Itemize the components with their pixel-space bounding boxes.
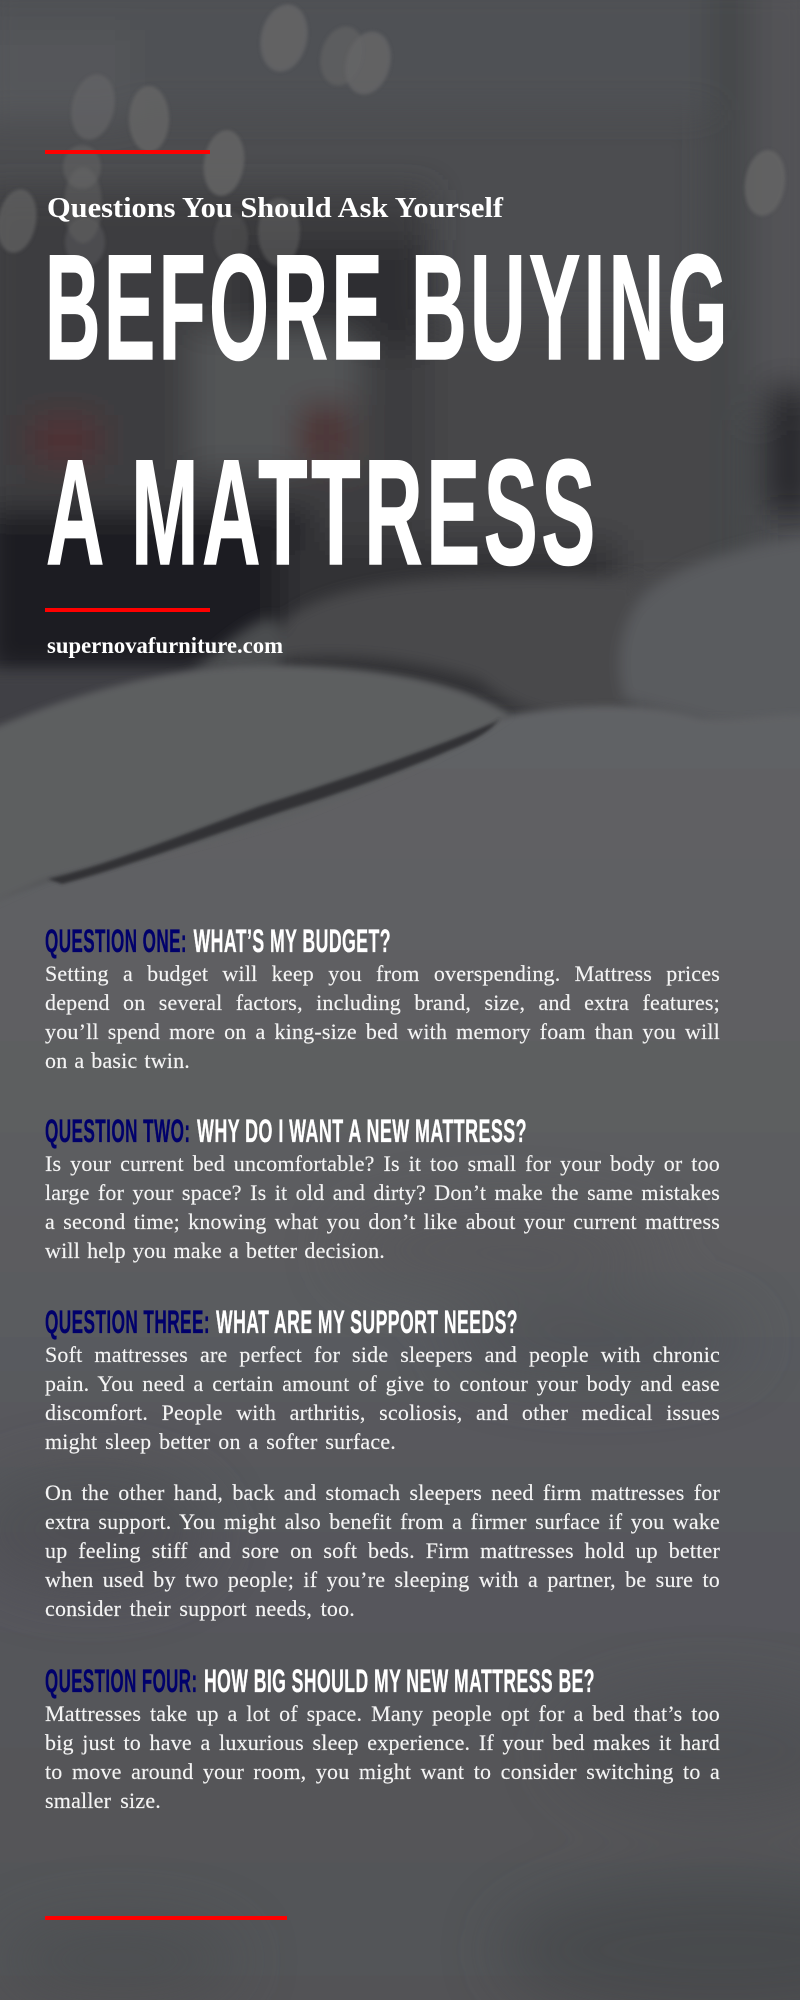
mattress surface — [0, 706, 800, 2000]
bottom red rule — [45, 1916, 287, 1920]
crease between pillow and mattress — [48, 718, 500, 884]
heading: question four — [45, 1663, 595, 1699]
heading: question two: QUESTION TWO: — [45, 1113, 190, 1149]
body text: question three: might sleep better on a softer surface. — [45, 1429, 396, 1454]
body text: question four: Mattresses take up a lot of space. Many people opt for a bed that’s too — [45, 1701, 720, 1726]
body text: question one: you’ll spend more on a king-size bed with memory foam than you will — [45, 1019, 720, 1044]
body text: question four — [44, 1701, 720, 1813]
heading: question three: WHAT ARE MY SUPPORT NEEDS? — [216, 1304, 518, 1340]
body text: question three: discomfort. People with arthritis, scoliosis, and other medical issues — [45, 1400, 720, 1425]
body text: question one: Setting a budget will keep you from overspending. Mattress prices — [45, 961, 720, 986]
heading: question three — [45, 1304, 518, 1340]
body text: question three: Soft mattresses are perfect for side sleepers and people with chronic — [45, 1342, 720, 1367]
question four — [44, 1663, 720, 1813]
subtitle: Questions You Should Ask Yourself — [47, 193, 504, 224]
question one — [45, 923, 720, 1073]
heading: question two — [45, 1113, 527, 1149]
body text: question three: when used by two people; if you’re sleeping with a partner, be sure to — [45, 1567, 720, 1592]
body text: question three: consider their support needs, too. — [45, 1596, 355, 1621]
body text: question one: depend on several factors, including brand, size, and extra features; — [45, 990, 720, 1015]
heading: question two: WHY DO I WANT A NEW MATTRESS? — [197, 1113, 527, 1149]
body text: question one: on a basic twin. — [45, 1048, 190, 1073]
body text: question three — [44, 1342, 720, 1621]
body text: question three: up feeling stiff and sore on soft beds. Firm mattresses hold up better — [45, 1538, 720, 1563]
lower red rule — [45, 608, 210, 612]
body text: question two: Is your current bed uncomfortable? Is it too small for your body or too — [45, 1151, 720, 1176]
heading: question one: QUESTION ONE: — [45, 923, 187, 959]
body text: question four: smaller size. — [45, 1788, 161, 1813]
body text: question three: pain. You need a certain amount of give to contour your body and ease — [45, 1371, 720, 1396]
front pillow — [0, 665, 510, 905]
body text: question three: extra support. You might also benefit from a firmer surface if you wake — [45, 1509, 720, 1534]
body text: question two: will help you make a better decision. — [45, 1238, 385, 1263]
heading: question three: QUESTION THREE: — [45, 1304, 210, 1340]
question two — [44, 1113, 720, 1263]
body text: question one — [45, 961, 720, 1073]
question three — [44, 1304, 720, 1621]
bokeh lights — [0, 0, 789, 267]
heading: question four: QUESTION FOUR: — [45, 1663, 198, 1699]
body text: question two: a second time; knowing what you don’t like about your current mattress — [45, 1209, 720, 1234]
body text: question three: On the other hand, back and stomach sleepers need firm mattresses for — [45, 1480, 720, 1505]
title — [45, 240, 731, 580]
body text: question four: big just to have a luxurious sleep experience. If your bed makes it hard — [45, 1730, 720, 1755]
body text: question four: to move around your room, you might want to consider switching to a — [45, 1759, 720, 1784]
heading: question one: WHAT’S MY BUDGET? — [194, 923, 391, 959]
top red rule — [45, 150, 210, 154]
body text: question two — [44, 1151, 720, 1263]
body text: question two: large for your space? Is it old and dirty? Don’t make the same mistakes — [45, 1180, 720, 1205]
website: supernovafurniture.com — [47, 633, 283, 658]
